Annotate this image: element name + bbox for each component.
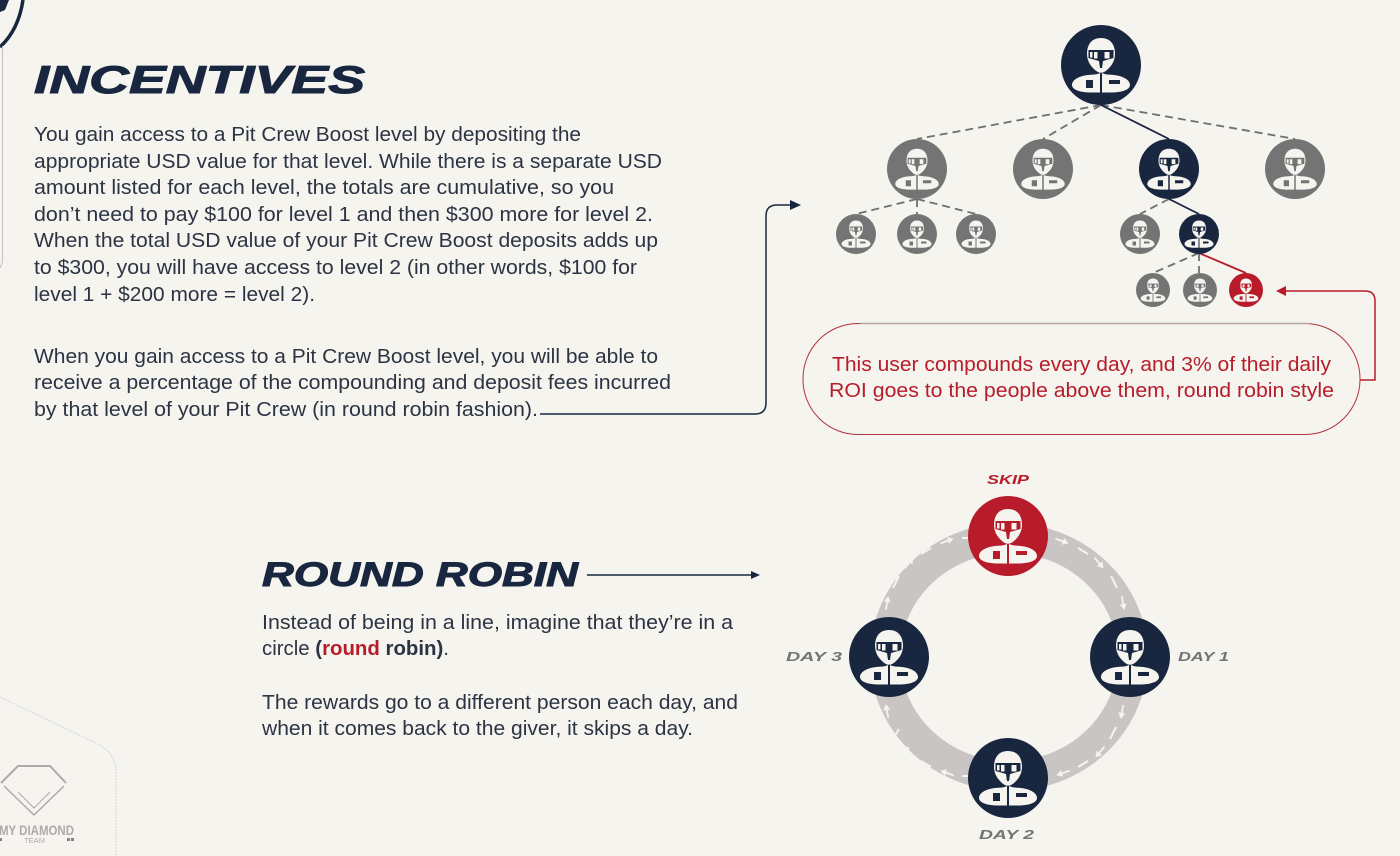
label: day 3: DAY 3	[786, 649, 843, 664]
text block: round robin explanation: The rewards go to a different person each day, and	[262, 692, 738, 714]
tree diagram: pit crew	[836, 25, 1325, 307]
icon: level 2 racer c	[956, 214, 996, 254]
icon: day 1 racer	[1090, 617, 1170, 697]
decorative corner badge	[0, 0, 23, 268]
label: skip: SKIP	[987, 472, 1029, 487]
logo: my diamond team	[0, 766, 74, 845]
text block: incentives paragraph two: When you gain access to a Pit Crew Boost level, you will be able to	[34, 346, 658, 368]
icon: level 1 racer b	[1013, 139, 1073, 199]
track direction arrows	[882, 535, 1128, 779]
icon: day 3 racer	[849, 617, 929, 697]
text block: incentives paragraph one	[34, 124, 662, 306]
logo: my diamond team: MY DIAMOND	[0, 822, 74, 838]
icon: skip racer	[968, 496, 1048, 576]
arrow: round robin to ring	[587, 571, 760, 579]
text block: round robin explanation: circle (round robin).	[262, 638, 449, 660]
text block: incentives paragraph two: receive a percentage of the compounding and deposit fees incurred	[34, 372, 671, 394]
icon: top racer	[1061, 25, 1141, 105]
text block: round robin explanation: when it comes back to the giver, it skips a day.	[261, 718, 693, 740]
text block: round robin explanation: Instead of being in a line, imagine that they’re in a	[262, 612, 734, 634]
arrow: paragraph to tree	[540, 200, 801, 414]
icon: level 2 racer d	[1120, 214, 1160, 254]
track	[885, 538, 1133, 776]
icon: diamond	[1, 766, 66, 815]
label: day 2: DAY 2	[979, 827, 1035, 842]
text block: incentives paragraph one: level 1 + $200 more = level 2).	[34, 284, 315, 306]
decorative dotted panel edge	[0, 697, 116, 856]
callout: compounding	[803, 324, 1360, 434]
text block: incentives paragraph one: don’t need to pay $100 for level 1 and then $300 more for level 2.	[34, 204, 653, 226]
text block: incentives paragraph two	[34, 346, 671, 421]
icon: level 1 racer a	[887, 139, 947, 199]
icon: level 2 racer e	[1179, 214, 1219, 254]
title: incentives: INCENTIVES	[34, 59, 365, 102]
arrow: callout to red racer	[1276, 286, 1375, 380]
text block: incentives paragraph one: appropriate USD value for that level. While there is a separate USD	[34, 151, 662, 173]
label: day 1: DAY 1	[1178, 649, 1229, 664]
icon: day 2 racer	[968, 738, 1048, 818]
logo: my diamond team: TEAM	[24, 838, 45, 845]
icon: level 3 racer red	[1229, 273, 1263, 307]
icon: level 3 racer a	[1136, 273, 1170, 307]
ring diagram: round robin	[786, 472, 1229, 842]
text block: incentives paragraph one: You gain access to a Pit Crew Boost level by depositing the	[34, 124, 581, 146]
icon: level 3 racer b	[1183, 273, 1217, 307]
callout: compounding: ROI goes to the people above them, round robin style	[829, 380, 1334, 402]
text block: incentives paragraph two: by that level of your Pit Crew (in round robin fashion).	[34, 399, 538, 421]
text block: incentives paragraph one: When the total USD value of your Pit Crew Boost deposits adds up	[34, 230, 658, 252]
title: round robin: ROUND ROBIN	[262, 556, 580, 594]
text block: incentives paragraph one: to $300, you will have access to level 2 (in other words, $100 for	[34, 257, 637, 279]
text block: incentives paragraph one: amount listed for each level, the totals are cumulative, so you	[34, 177, 614, 199]
icon: level 2 racer b	[897, 214, 937, 254]
text block: round robin explanation	[261, 612, 738, 740]
callout: compounding: This user compounds every day, and 3% of their daily	[832, 354, 1331, 376]
icon: level 2 racer a	[836, 214, 876, 254]
icon: level 1 racer d	[1265, 139, 1325, 199]
icon: level 1 racer c	[1139, 139, 1199, 199]
tree connectors	[856, 105, 1295, 273]
